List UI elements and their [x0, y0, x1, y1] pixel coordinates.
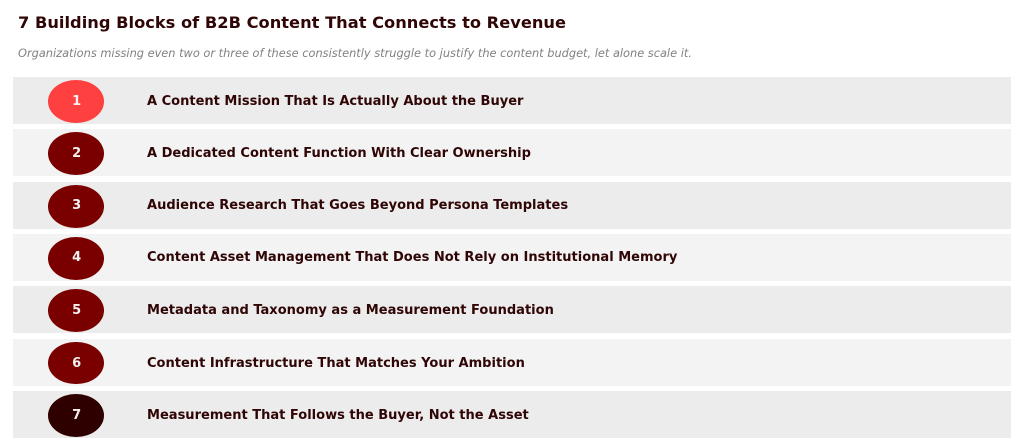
icon: number 4 badge — [48, 237, 104, 280]
panel: building block 5 — [13, 286, 1011, 333]
icon: number 7 badge — [48, 394, 104, 437]
panel: building block 6 — [13, 338, 1011, 386]
title: 7 Building Blocks of B2B Content That Connects to Revenue — [18, 13, 566, 32]
icon: number 7 badge: 7 — [72, 408, 81, 423]
panel: building block 1 — [13, 77, 1011, 124]
icon: number 3 badge: 3 — [72, 198, 81, 213]
icon: number 6 badge — [48, 342, 104, 384]
panel: building block 3 — [13, 182, 1011, 229]
panel: building block 2 — [13, 129, 1011, 176]
subtitle: Organizations missing even two or three of these consistently struggle to justify the content budget, let alone scale it. — [18, 46, 692, 60]
label: block 2: A Dedicated Content Function With Clear Ownership — [147, 146, 531, 161]
icon: number 2 badge — [48, 132, 104, 175]
panel: building block 7 — [13, 391, 1011, 438]
icon: number 2 badge: 2 — [72, 146, 81, 161]
icon: number 5 badge: 5 — [72, 303, 81, 318]
icon: number 3 badge — [48, 185, 104, 228]
label: block 3: Audience Research That Goes Beyond Persona Templates — [147, 198, 568, 213]
label: block 7: Measurement That Follows the Buyer, Not the Asset — [147, 408, 529, 423]
icon: number 5 badge — [48, 289, 104, 332]
label: block 5: Metadata and Taxonomy as a Measurement Foundation — [147, 303, 554, 318]
label: block 4: Content Asset Management That Does Not Rely on Institutional Memory — [147, 250, 677, 265]
panel: building block 4 — [13, 234, 1011, 281]
label: block 6: Content Infrastructure That Matches Your Ambition — [147, 356, 525, 370]
icon: number 4 badge: 4 — [72, 250, 81, 265]
icon: number 1 badge — [48, 80, 104, 123]
label: block 1: A Content Mission That Is Actually About the Buyer — [147, 94, 523, 109]
icon: number 1 badge: 1 — [72, 94, 81, 109]
icon: number 6 badge: 6 — [72, 356, 81, 371]
